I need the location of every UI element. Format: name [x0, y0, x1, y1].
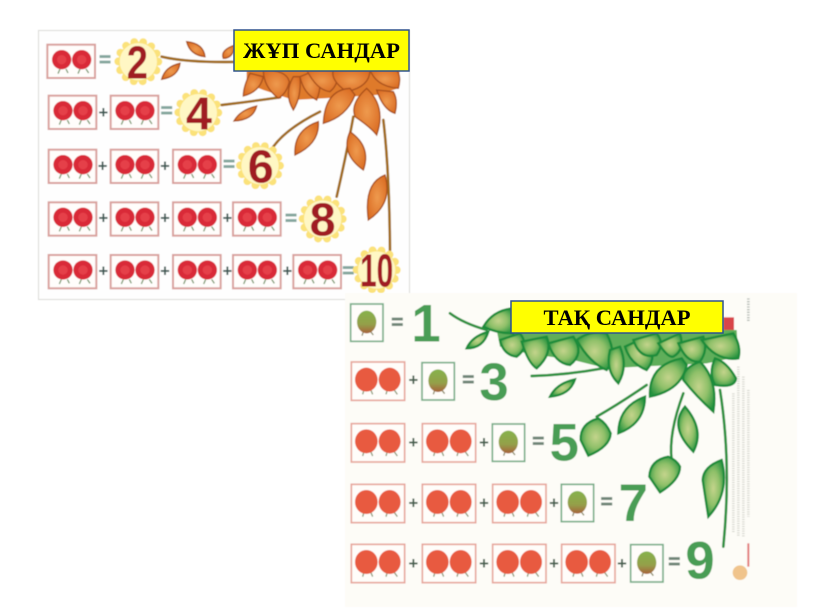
- row: 7: +: [549, 494, 559, 513]
- row: 6: +: [98, 156, 108, 175]
- label: even numbers: ЖҰП САНДАР: [243, 38, 400, 63]
- row: 9: +: [549, 554, 559, 573]
- row: 8: +: [222, 209, 232, 228]
- row: 5: 5: [550, 414, 579, 473]
- row: 8: 8: [310, 194, 336, 246]
- row: 4: [49, 87, 218, 139]
- row: 4: +: [98, 103, 108, 122]
- row: 10: 10: [360, 245, 393, 297]
- panel: even numbers: [38, 30, 410, 300]
- row: 6: +: [160, 156, 170, 175]
- row: 1: [351, 295, 441, 354]
- row: 7: [351, 474, 648, 533]
- icon: publisher logo: [733, 543, 749, 580]
- row: 7: 7: [619, 474, 648, 533]
- row: 4: =: [161, 99, 173, 122]
- row: 5: =: [532, 430, 544, 453]
- row: 10: =: [342, 259, 354, 282]
- row: 5: +: [479, 433, 489, 452]
- label: odd numbers: [511, 301, 723, 333]
- row: 3: +: [408, 370, 418, 389]
- row: 5: +: [408, 433, 418, 452]
- label: even numbers: [234, 30, 409, 71]
- row: 6: =: [223, 153, 235, 176]
- row: 3: [351, 353, 509, 412]
- row: 2: 2: [127, 37, 148, 89]
- row: 6: [49, 140, 280, 192]
- row: 4: 4: [186, 87, 212, 139]
- row: 7: =: [601, 491, 613, 514]
- row: 2: =: [99, 49, 111, 72]
- row: 10: +: [98, 261, 108, 280]
- panel: odd numbers: [345, 293, 797, 607]
- row: 3: 3: [479, 353, 509, 412]
- row: 8: +: [98, 209, 108, 228]
- row: 9: [351, 532, 715, 591]
- row: 10: +: [282, 261, 292, 280]
- row: 10: +: [160, 261, 170, 280]
- row: 7: +: [479, 494, 489, 513]
- row: 9: +: [617, 554, 627, 573]
- row: 10: [49, 245, 397, 297]
- row: 5: [351, 414, 579, 473]
- row: 8: +: [160, 209, 170, 228]
- row: 8: [49, 194, 343, 246]
- row: 9: 9: [685, 532, 715, 591]
- row: 6: 6: [248, 140, 274, 192]
- row: 3: =: [462, 369, 474, 392]
- row: 1: =: [391, 311, 403, 334]
- row: 9: +: [408, 554, 418, 573]
- label: odd numbers: ТАҚ САНДАР: [544, 305, 690, 330]
- row: 7: +: [408, 494, 418, 513]
- row: 8: =: [285, 207, 297, 230]
- green vine with leaves: [450, 308, 739, 547]
- row: 9: =: [668, 551, 680, 574]
- orange branch with leaves: [162, 42, 400, 250]
- row: 1: 1: [411, 295, 441, 354]
- row: 10: +: [222, 261, 232, 280]
- row: 9: +: [479, 554, 489, 573]
- row: 2: [47, 37, 158, 89]
